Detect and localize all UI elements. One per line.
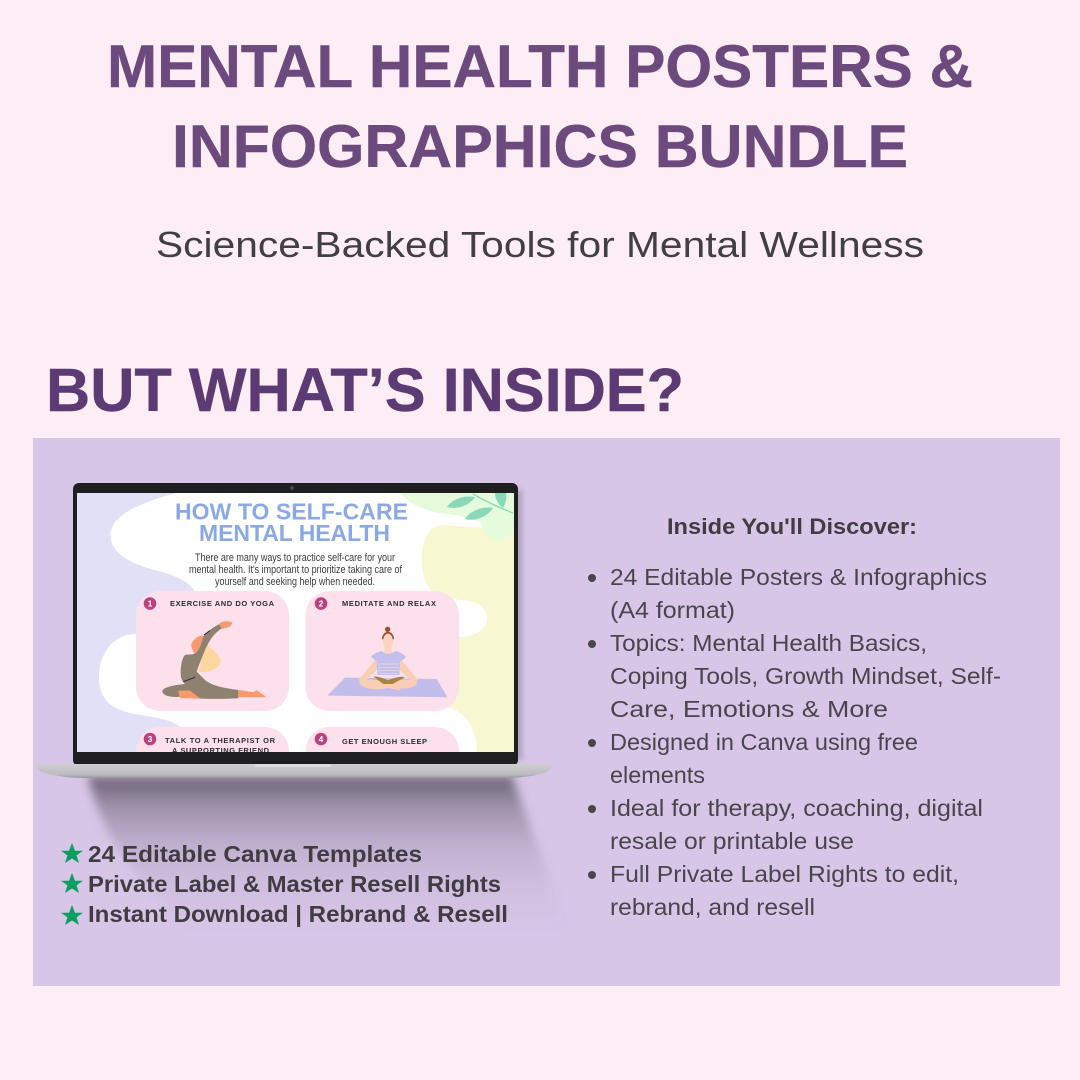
icon: green star: [61, 843, 83, 863]
screen heading: MENTAL HEALTH: [199, 520, 390, 546]
bullet: uses: Ideal for therapy, coaching, digital: [610, 795, 983, 821]
card 4: get enough sleep: 4: [319, 735, 324, 744]
subtitle: Science-Backed Tools for Mental Wellness: [156, 224, 924, 265]
screen body text: yourself and seeking help when needed.: [215, 576, 375, 588]
card 3: talk to a therapist: 3: [148, 735, 153, 744]
icon: meditating figure: [327, 627, 448, 697]
bullet: uses: resale or printable use: [610, 828, 854, 854]
bullet: topics: Topics: Mental Health Basics,: [610, 630, 927, 656]
card 1: exercise and do yoga: 1: [148, 600, 153, 608]
laptop base: [37, 764, 552, 778]
bullet: canva: elements: [610, 762, 705, 788]
title: [107, 33, 973, 180]
title: INFOGRAPHICS BUNDLE: [172, 113, 908, 180]
screen body text: mental health. It's important to prioritize taking care of: [189, 564, 403, 576]
bullet: rights: [588, 861, 959, 920]
laptop shadow: [88, 776, 575, 960]
bullet: topics: Care, Emotions & More: [610, 696, 888, 722]
icon: green star: [61, 873, 83, 893]
card 2: meditate and relax: [306, 591, 459, 711]
leaves: [447, 493, 513, 520]
laptop mockup: [37, 483, 552, 787]
discover bullet list: [588, 564, 1001, 920]
screen body text: There are many ways to practice self-care for your: [195, 552, 395, 564]
bullet: rights: Full Private Label Rights to edit,: [610, 861, 959, 887]
card 4: get enough sleep: GET ENOUGH SLEEP: [342, 737, 427, 746]
section heading: BUT WHAT’S INSIDE?: [46, 356, 684, 424]
screen body text: [189, 552, 403, 588]
card 3: talk to a therapist: [136, 727, 289, 752]
card 2: meditate and relax: MEDITATE AND RELAX: [342, 599, 436, 608]
card 3: talk to a therapist: TALK TO A THERAPIST OR: [165, 736, 276, 745]
icon: yoga figure: [162, 621, 267, 699]
feature list with stars: [61, 841, 508, 927]
screen heading: HOW TO SELF-CARE: [175, 498, 408, 524]
bullet: topics: Coping Tools, Growth Mindset, Self-: [610, 663, 1001, 689]
panel: what's inside: [33, 438, 1060, 986]
card 1: exercise and do yoga: [136, 591, 289, 711]
feature list with stars: Private Label & Master Resell Rights: [88, 871, 501, 897]
bullet: posters: (A4 format): [610, 597, 735, 623]
bullet: topics: [588, 630, 1001, 722]
icon: green star: [61, 905, 83, 925]
screen heading: [176, 504, 408, 541]
card 2: meditate and relax: 2: [319, 600, 324, 608]
decorative blobs: [77, 493, 514, 752]
bullet: posters: [588, 564, 987, 623]
card 4: get enough sleep: [306, 727, 459, 752]
feature list with stars: 24 Editable Canva Templates: [88, 841, 422, 867]
laptop screen: [77, 493, 514, 752]
bullet: canva: [588, 729, 918, 788]
laptop lid: [73, 483, 518, 766]
bullet: rights: rebrand, and resell: [610, 894, 815, 920]
bullet: uses: [588, 795, 983, 854]
bullet: canva: Designed in Canva using free: [610, 729, 918, 755]
discover heading: Inside You'll Discover:: [667, 514, 917, 539]
card 3: talk to a therapist: A SUPPORTING FRIEND: [172, 746, 270, 755]
title: MENTAL HEALTH POSTERS &: [107, 33, 973, 100]
card 1: exercise and do yoga: EXERCISE AND DO YOGA: [170, 599, 275, 608]
bullet: posters: 24 Editable Posters & Infographics: [610, 564, 987, 590]
feature list with stars: Instant Download | Rebrand & Resell: [88, 901, 508, 927]
